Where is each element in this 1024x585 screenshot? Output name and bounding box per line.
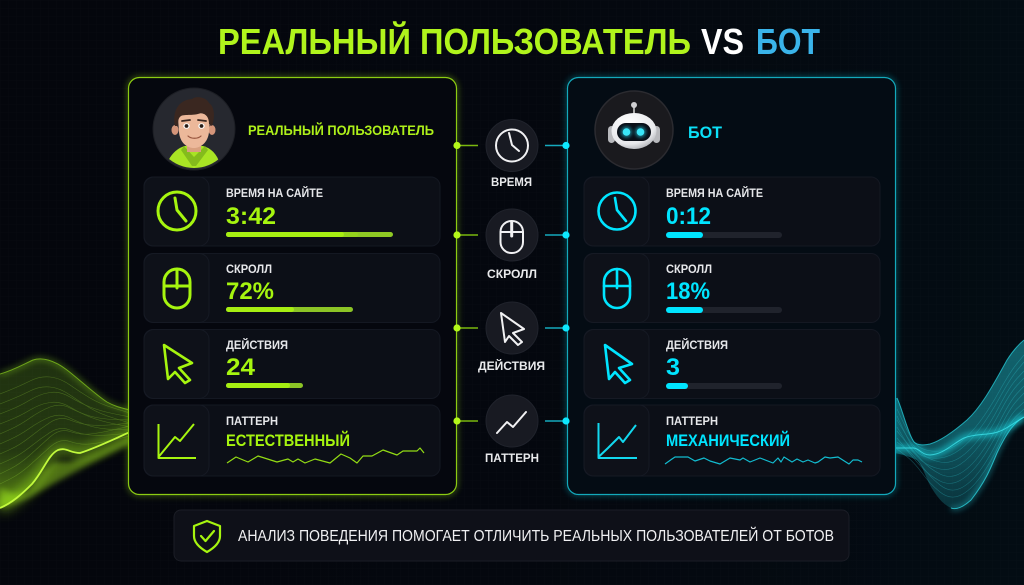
row: actions: [584, 330, 880, 398]
icon: mouse: [500, 221, 523, 253]
row: scroll: [144, 254, 440, 322]
row: scroll: СКРОЛЛ: [666, 264, 712, 276]
row: actions: 3: [666, 354, 680, 381]
avatar: bot: [595, 91, 673, 169]
icon: cursor: [501, 313, 524, 345]
row: time on site: 0:12: [666, 203, 711, 230]
row: scroll: 18%: [666, 278, 710, 305]
icon: shield check: [194, 521, 220, 552]
footer callout: [174, 510, 849, 561]
title: VS: [701, 21, 744, 62]
footer callout: АНАЛИЗ ПОВЕДЕНИЯ ПОМОГАЕТ ОТЛИЧИТЬ РЕАЛЬНЫХ ПОЛЬЗОВАТЕЛЕЙ ОТ БОТОВ: [238, 526, 834, 545]
panel: real user: [128, 78, 456, 494]
row: scroll: 72%: [226, 278, 274, 305]
row: scroll: СКРОЛЛ: [226, 264, 272, 276]
icon: clock: [496, 130, 528, 162]
icon: mouse: [164, 269, 190, 308]
icon: clock: [158, 192, 196, 230]
row: time on site: [144, 177, 440, 246]
center: actions comparison: ДЕЙСТВИЯ: [478, 358, 545, 373]
center: actions comparison: [478, 302, 545, 373]
title: БОТ: [756, 21, 820, 62]
icon: cursor: [164, 345, 192, 383]
center: pattern comparison: [485, 395, 539, 465]
center: time comparison: [486, 120, 538, 189]
row: pattern: [144, 405, 440, 476]
center: scroll comparison: [486, 209, 538, 281]
icon: clock: [598, 192, 636, 230]
icon: chart: [598, 423, 637, 458]
row: pattern: [584, 405, 880, 476]
title: РЕАЛЬНЫЙ ПОЛЬЗОВАТЕЛЬ: [218, 20, 691, 62]
icon: chart: [158, 424, 196, 458]
icon: trend line: [497, 412, 526, 433]
row: pattern: ПАТТЕРН: [226, 416, 278, 428]
row: actions: 24: [226, 354, 256, 381]
row: pattern: ЕСТЕСТВЕННЫЙ: [226, 431, 350, 450]
row: time on site: 3:42: [226, 203, 276, 230]
row: pattern: МЕХАНИЧЕСКИЙ: [666, 431, 790, 450]
panel: bot: [568, 78, 896, 494]
sparkline: mechanical: [665, 457, 862, 464]
icon: cursor: [605, 345, 632, 383]
center: time comparison: ВРЕМЯ: [491, 175, 532, 189]
avatar: user: [153, 88, 235, 170]
sparkline: natural: [227, 448, 424, 463]
panel heading: real user: РЕАЛЬНЫЙ ПОЛЬЗОВАТЕЛЬ: [248, 121, 434, 138]
row: actions: ДЕЙСТВИЯ: [226, 339, 288, 352]
row: time on site: ВРЕМЯ НА САЙТЕ: [226, 187, 323, 200]
row: scroll: [584, 254, 880, 322]
row: actions: ДЕЙСТВИЯ: [666, 339, 728, 352]
row: time on site: ВРЕМЯ НА САЙТЕ: [666, 187, 763, 200]
center: pattern comparison: ПАТТЕРН: [485, 451, 539, 465]
connector lines and dots: [453, 142, 570, 425]
left green wave decoration: [0, 359, 130, 508]
panel heading: bot: БОТ: [688, 123, 723, 142]
center: scroll comparison: СКРОЛЛ: [487, 267, 537, 281]
row: pattern: ПАТТЕРН: [666, 416, 718, 428]
row: time on site: [584, 177, 880, 246]
right cyan wave decoration: [894, 340, 1024, 509]
row: actions: [144, 330, 440, 398]
icon: mouse: [604, 269, 630, 308]
